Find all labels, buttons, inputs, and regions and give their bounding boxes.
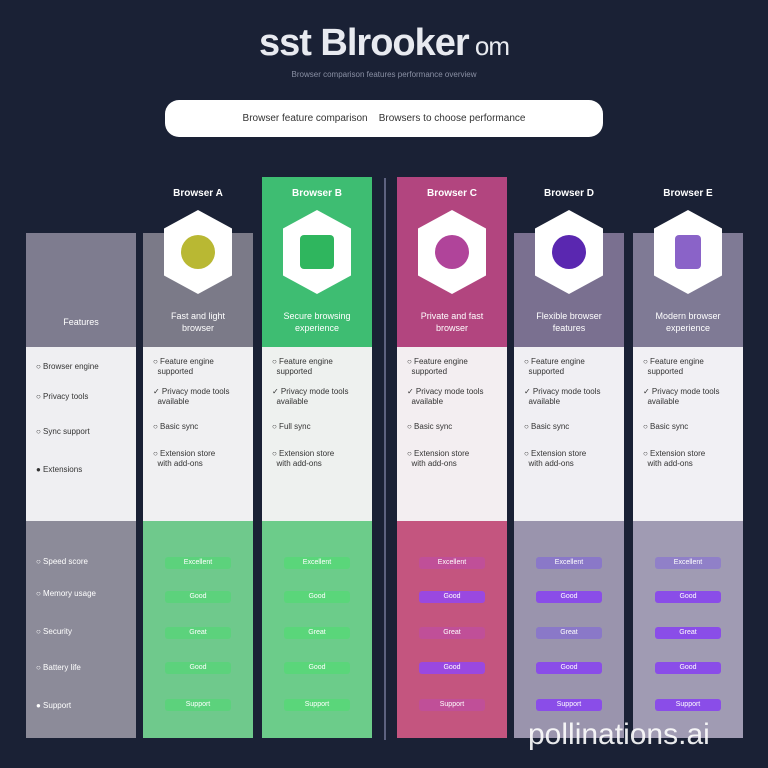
panel: column 1: with add-ons (157, 459, 203, 468)
panel: column 0 labels: ○ Memory usage (36, 589, 96, 598)
panel: column 5: with add-ons (647, 459, 693, 468)
panel: column 1: ○ Extension store (153, 449, 215, 458)
panel: column 1: available (157, 397, 189, 406)
panel: column 3: ○ Feature engine (407, 357, 468, 366)
panel: column 1: browser (182, 323, 214, 333)
panel: column 5: Good (679, 664, 697, 671)
panel: column 4: Support (557, 701, 581, 708)
panel: column 0 labels: ○ Privacy tools (36, 392, 88, 401)
panel: column 0 labels: ○ Speed score (36, 557, 88, 566)
icon: magenta badge (418, 210, 486, 294)
panel: column 3: Great (443, 629, 461, 636)
panel: column 1 (143, 188, 253, 738)
icon: green badge (283, 210, 351, 294)
panel: column 4: ○ Feature engine (524, 357, 585, 366)
panel: column 1: ○ Feature engine (153, 357, 214, 366)
panel: column 3: supported (411, 367, 447, 376)
panel: column 0 labels: Features (63, 317, 99, 327)
panel: column 2: Excellent (303, 559, 331, 566)
panel: column 0 labels: ○ Sync support (36, 427, 90, 436)
panel: column 4: features (553, 323, 585, 333)
panel: column 0 labels: ○ Security (36, 627, 72, 636)
panel: column 2: available (276, 397, 308, 406)
panel: column 2: ○ Feature engine (272, 357, 333, 366)
panel: column 0 labels (26, 233, 136, 738)
panel: column 5: Great (679, 629, 697, 636)
panel: column 1: Good (189, 593, 207, 600)
banner pill (165, 100, 603, 137)
panel: column 1: ✓ Privacy mode tools (153, 387, 230, 396)
panel: column 5: Modern browser (655, 311, 721, 321)
panel: column 2: Secure browsing (283, 311, 351, 321)
panel: column 3: Browser C (427, 188, 477, 199)
panel: column 2: ○ Full sync (272, 422, 311, 431)
panel: column 3: Good (443, 664, 461, 671)
panel: column 5: Support (676, 701, 700, 708)
panel: column 5: Excellent (674, 559, 702, 566)
panel: column 2: ○ Extension store (272, 449, 334, 458)
panel: column 1: Excellent (184, 559, 212, 566)
panel: column 4: ○ Basic sync (524, 422, 569, 431)
panel: column 2: Browser B (292, 188, 342, 199)
panel: column 1: supported (157, 367, 193, 376)
panel: column 1: ○ Basic sync (153, 422, 198, 431)
panel: column 2: Support (305, 701, 329, 708)
panel: column 1: Great (189, 629, 207, 636)
panel: column 2: Good (308, 664, 326, 671)
panel: column 4: Browser D (544, 188, 594, 199)
panel: column 3: available (411, 397, 443, 406)
panel: column 0 labels: ● Extensions (36, 465, 82, 474)
panel: column 5: Browser E (663, 188, 713, 199)
panel: column 5: experience (666, 323, 710, 333)
panel: column 1: Support (186, 701, 210, 708)
panel: column 3: with add-ons (411, 459, 457, 468)
panel: column 3: ✓ Privacy mode tools (407, 387, 484, 396)
panel: column 4: Excellent (555, 559, 583, 566)
icon: violet badge (654, 210, 722, 294)
panel: column 5: ○ Feature engine (643, 357, 704, 366)
panel: column 3 (397, 177, 507, 738)
panel: column 2: Great (308, 629, 326, 636)
title: sst Blrooker om (259, 22, 509, 64)
panel: column 4: ✓ Privacy mode tools (524, 387, 601, 396)
banner pill: Browser feature comparison Browsers to choose performance (243, 113, 525, 124)
panel: column 5: ✓ Privacy mode tools (643, 387, 720, 396)
panel: column 1: Browser A (173, 188, 223, 199)
panel: column 3: Excellent (438, 559, 466, 566)
panel: column 2: experience (295, 323, 339, 333)
panel: column 5: ○ Basic sync (643, 422, 688, 431)
panel: column 4: with add-ons (528, 459, 574, 468)
panel: column 3: Good (443, 593, 461, 600)
panel: column 1: Good (189, 664, 207, 671)
panel: column 2 (262, 177, 372, 738)
panel: column 3: Private and fast (421, 311, 483, 321)
panel: column 4: Great (560, 629, 578, 636)
subtitle: Browser comparison features performance overview (292, 70, 476, 79)
panel: column 2: supported (276, 367, 312, 376)
icon: purple badge (535, 210, 603, 294)
panel: column 5 (633, 188, 743, 738)
panel: column 3: ○ Extension store (407, 449, 469, 458)
panel: column 0 labels: ○ Browser engine (36, 362, 99, 371)
panel: column 0 labels: ○ Battery life (36, 663, 81, 672)
panel: column 4: supported (528, 367, 564, 376)
panel: column 5: Good (679, 593, 697, 600)
watermark: pollinations.ai (528, 718, 710, 751)
panel: column 4: Good (560, 593, 578, 600)
panel: column 4: available (528, 397, 560, 406)
panel: column 4: Good (560, 664, 578, 671)
panel: column 5: supported (647, 367, 683, 376)
panel: column 5: ○ Extension store (643, 449, 705, 458)
panel: column 4: ○ Extension store (524, 449, 586, 458)
panel: column 3: browser (436, 323, 468, 333)
panel: column 4: Flexible browser (536, 311, 602, 321)
panel: column 2: Good (308, 593, 326, 600)
panel: column 2: ✓ Privacy mode tools (272, 387, 349, 396)
panel: column 5: available (647, 397, 679, 406)
icon: yellow badge (164, 210, 232, 294)
panel: column 1: Fast and light (171, 311, 225, 321)
panel: column 4 (514, 188, 624, 738)
panel: column 0 labels: ● Support (36, 701, 71, 710)
panel: column 2: with add-ons (276, 459, 322, 468)
panel: column 3: ○ Basic sync (407, 422, 452, 431)
divider line (384, 178, 386, 740)
panel: column 3: Support (440, 701, 464, 708)
